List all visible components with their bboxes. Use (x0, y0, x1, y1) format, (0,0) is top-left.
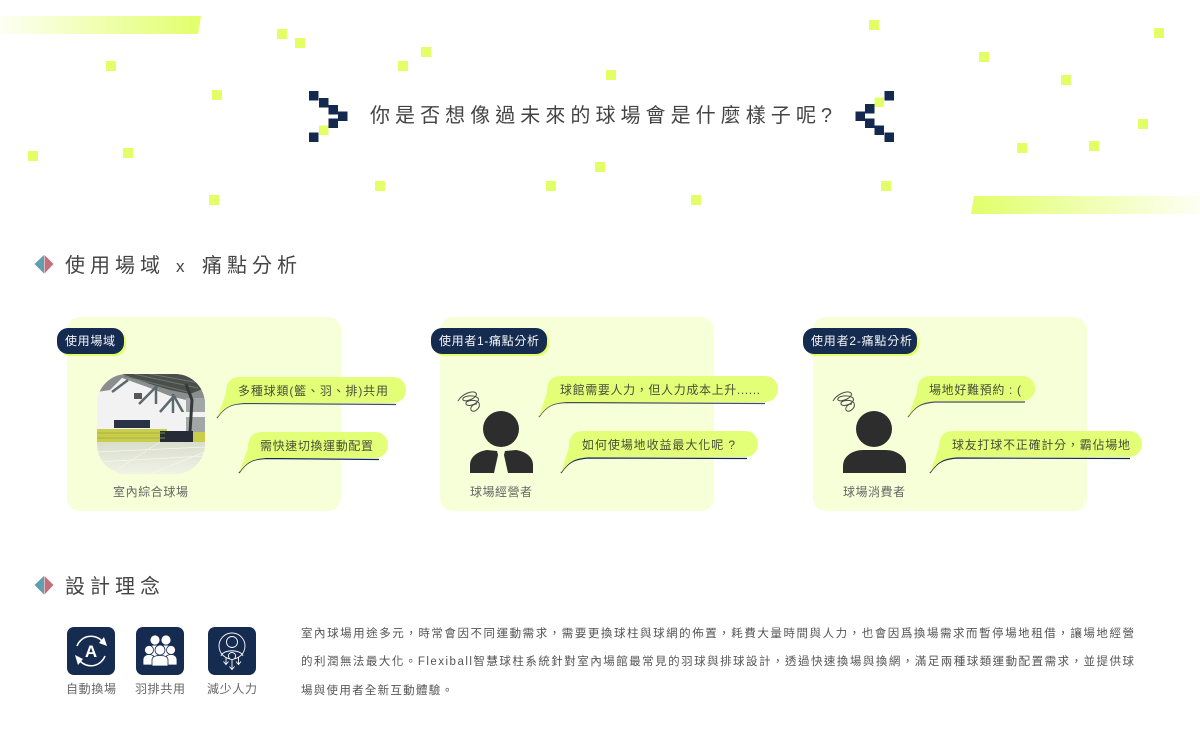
icon: right pixel chevron (856, 91, 894, 142)
icon: 羽排共用 (136, 627, 184, 675)
section heading: 使用場域 x 痛點分析: 痛點分析 (202, 254, 297, 277)
section heading: 設計理念: 設計理念 (65, 575, 160, 598)
speech bubble: 如何使場地收益最大化呢: 如何使場地收益最大化呢 ? (582, 437, 735, 452)
body text: design concept: 場與使用者全新互動體驗。 (301, 683, 453, 697)
decorative strip: top left (0, 16, 201, 34)
speech bubble: 球友打球不正確計分: 球友打球不正確計分，霸佔場地 (952, 437, 1130, 452)
panel: 使用者1 痛點分析 (431, 317, 778, 511)
icon: consumer person (843, 411, 906, 473)
speech bubble: 場地好難預約: 場地好難預約 : ( (929, 382, 1021, 397)
body text: design concept: 的利潤無法最大化。Flexiball智慧球柱系統針對室內場館最常見的羽球與排球設計，透過快速換場與換網，滿足兩種球類運動配置需求，並提供球 (301, 654, 1134, 668)
icon: 自動換場: A (85, 642, 97, 661)
section heading: 使用場域 x 痛點分析: x (176, 257, 185, 276)
caption: 球場經營者: 球場經營者 (470, 485, 532, 499)
tag: 使用者2-痛點分析 (803, 328, 919, 356)
caption: 室內綜合球場: 室內綜合球場 (113, 484, 188, 499)
section heading: 使用場域 x 痛點分析: 使用場域 (65, 254, 160, 277)
speech bubble: 場地好難預約 (908, 376, 1035, 417)
icon: 自動換場 (67, 627, 115, 675)
panel: 使用者2 痛點分析 (803, 317, 1142, 511)
icon: 減少人力 (208, 627, 256, 675)
body text: design concept (301, 626, 1134, 697)
speech bubble: 如何使場地收益最大化呢 (561, 431, 758, 473)
tag: 使用場域: 使用場域 (65, 333, 115, 348)
speech bubble: 多種球類共用 (217, 377, 406, 418)
photo: indoor sports court (97, 374, 205, 474)
tag: 使用者2-痛點分析: 使用者2-痛點分析 (811, 333, 912, 348)
label: 減少人力: 減少人力 (207, 681, 257, 696)
tag: 使用者1-痛點分析 (431, 328, 549, 356)
caption: 球場消費者: 球場消費者 (843, 484, 905, 499)
icon: dizzy squiggle (833, 392, 854, 411)
speech bubble: 需快速切換運動配置: 需快速切換運動配置 (260, 438, 373, 453)
icon: dizzy squiggle (458, 392, 479, 411)
title: 你是否想像過未來的球場會是什麼樣子呢? (370, 104, 832, 127)
tag: 使用者1-痛點分析: 使用者1-痛點分析 (439, 333, 539, 348)
body text: design concept: 室內球場用途多元，時常會因不同運動需求，需要更換球柱與球網的佈置，耗費大量時間與人力，也會因爲換場需求而暫停場地租借，讓場地經營 (301, 626, 1134, 640)
speech bubble: 球館需要人力: 球館需要人力，但人力成本上升...... (560, 382, 760, 397)
decorative strip: bottom right (971, 196, 1200, 214)
section heading: 使用場域 x 痛點分析 (34, 254, 297, 277)
panel: 使用場域 (57, 317, 406, 511)
speech bubble: 球館需要人力 (539, 376, 778, 417)
scattered lime squares (28, 20, 1164, 205)
icon: left pixel chevron (309, 91, 348, 142)
speech bubble: 需快速切換運動配置 (239, 432, 388, 473)
label: 自動換場: 自動換場 (66, 682, 116, 696)
tag: 使用場域 (57, 328, 126, 356)
label: 羽排共用: 羽排共用 (135, 682, 185, 696)
icon: manager person (470, 411, 533, 473)
speech bubble: 多種球類共用: 多種球類(籃、羽、排)共用 (238, 383, 388, 398)
speech bubble: 球友打球不正確計分 (930, 431, 1142, 473)
